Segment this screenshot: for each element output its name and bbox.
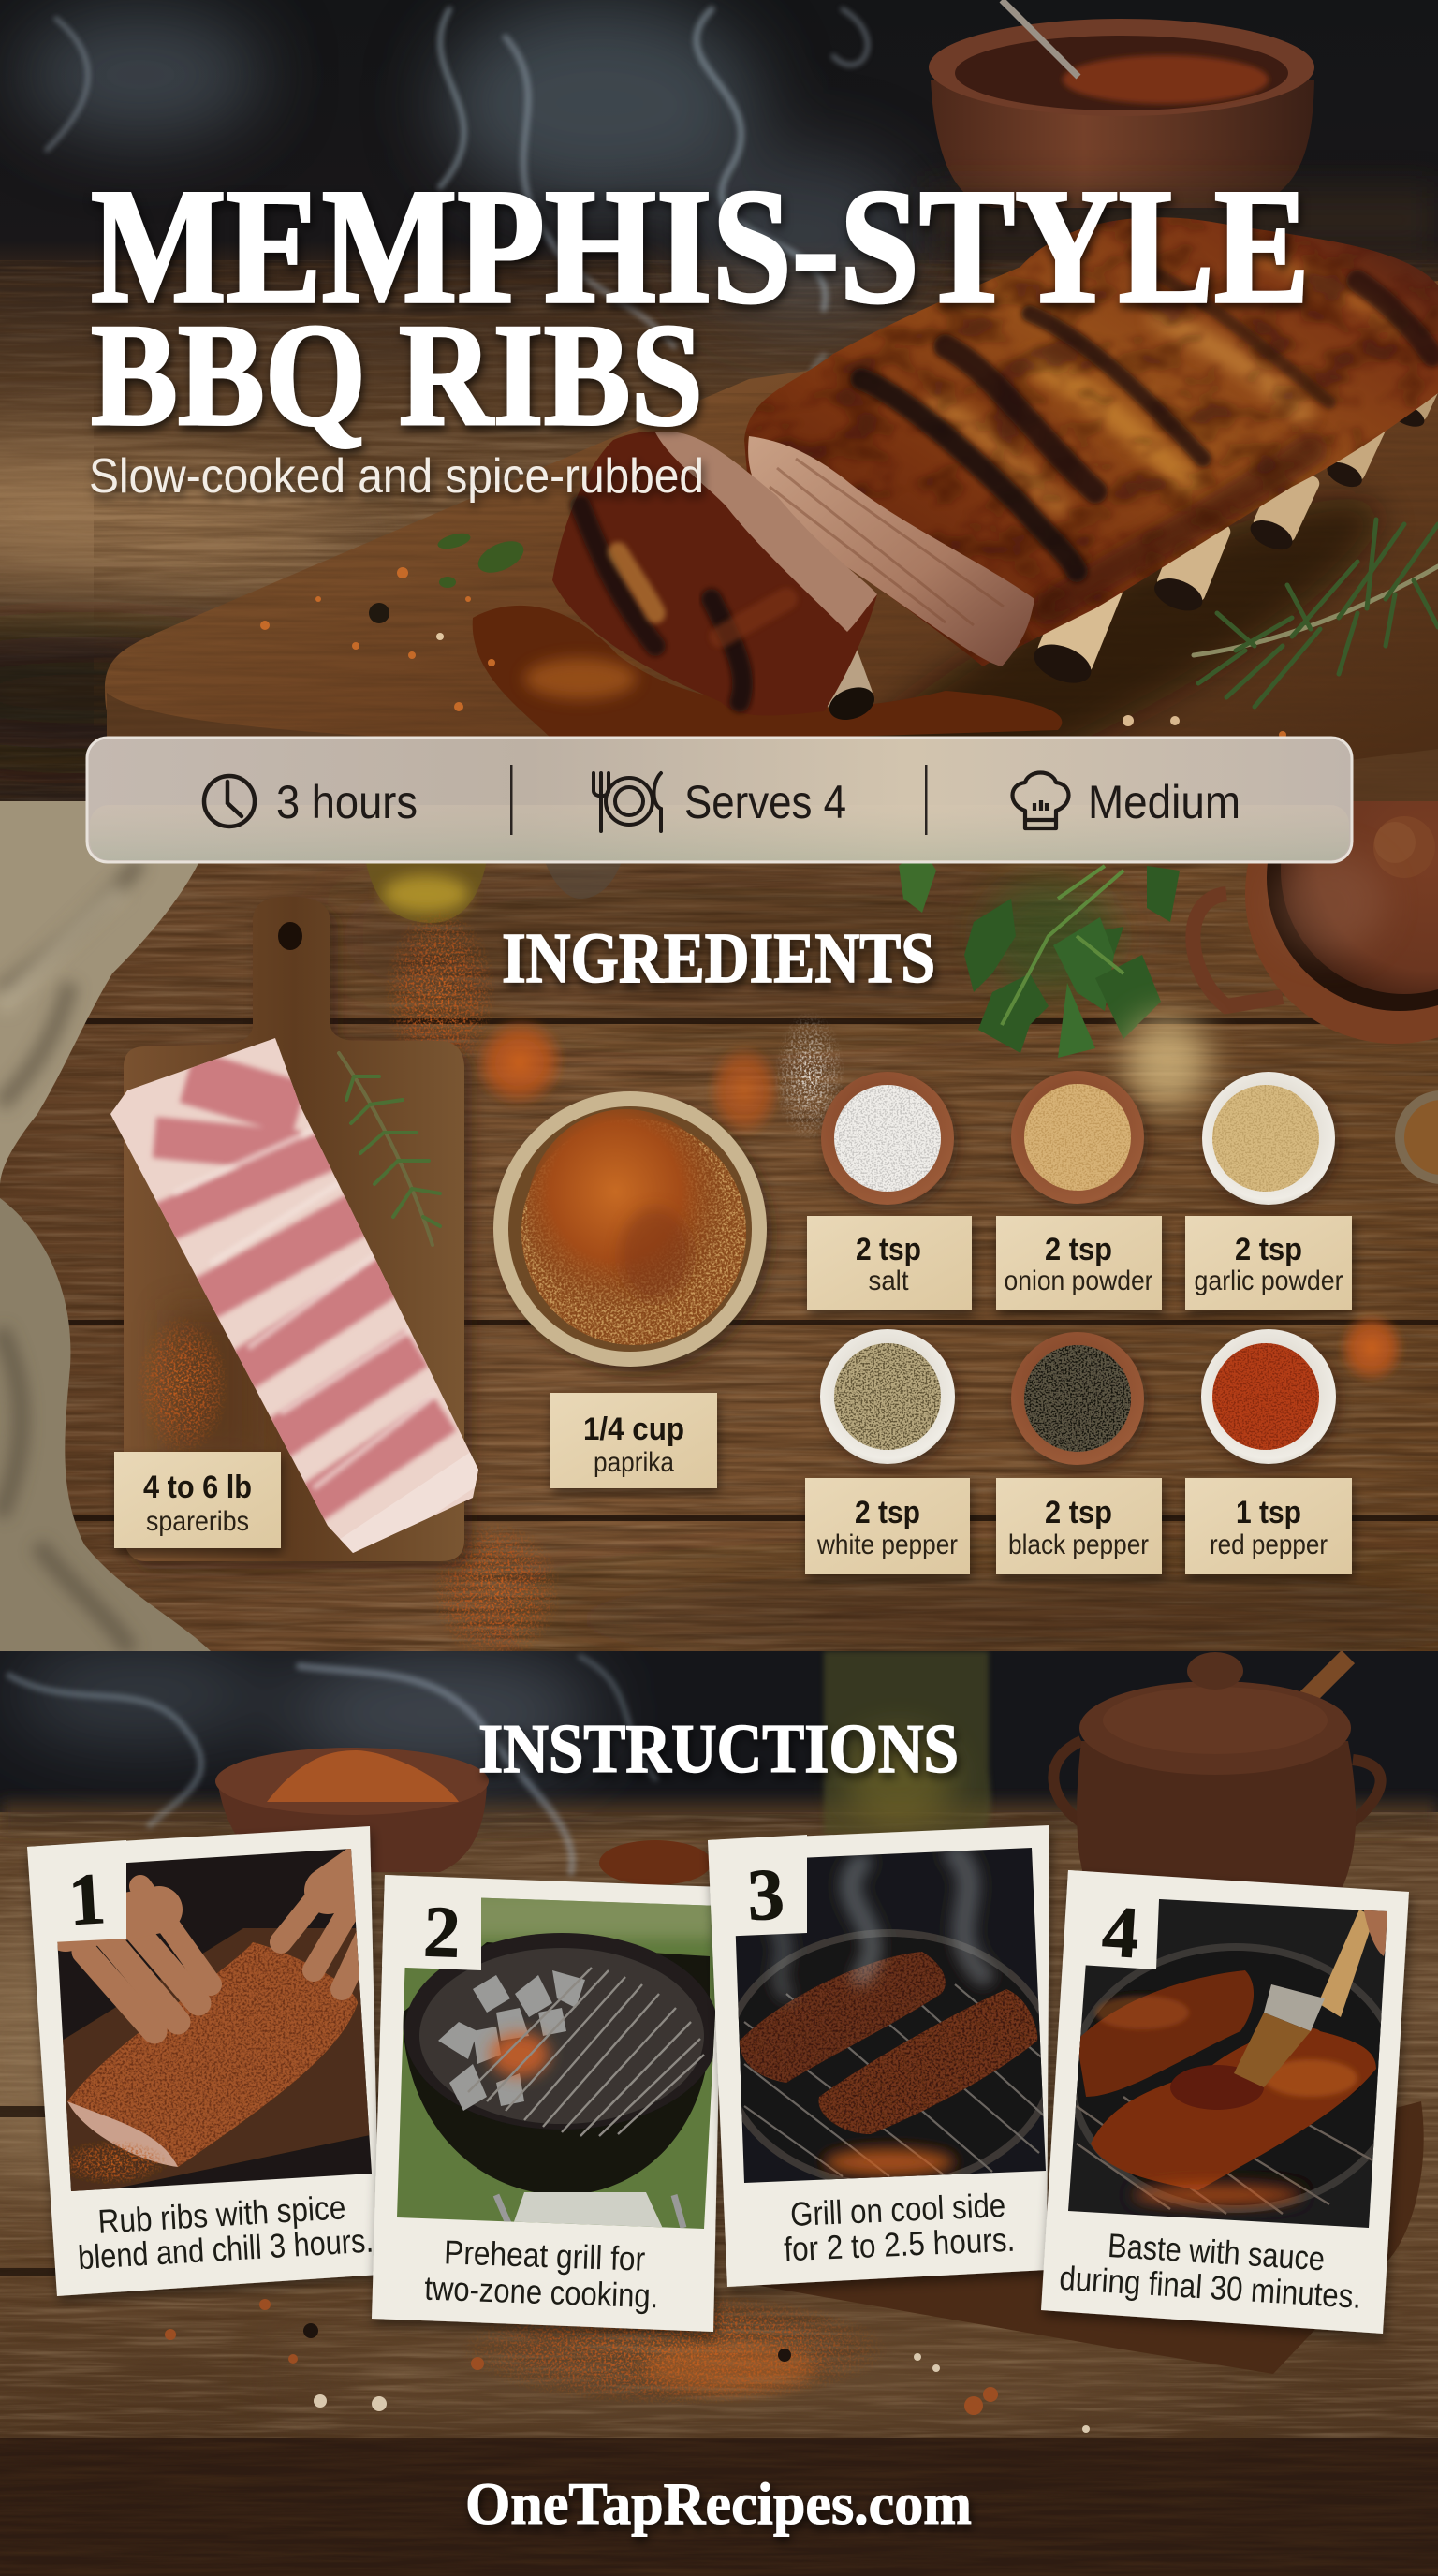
icon: basting brush xyxy=(1234,1910,1374,2087)
photo: ribs grilling on cool side xyxy=(726,1844,1053,2186)
info bar: time, servings, difficulty xyxy=(87,738,1352,862)
icon: wooden cutting board with handle xyxy=(124,897,472,1569)
label: red pepper xyxy=(1185,1478,1352,1574)
photo: basting ribs with sauce xyxy=(1067,1891,1400,2232)
label: garlic powder: 2 tsp xyxy=(1235,1232,1302,1267)
icon: charcoal pile xyxy=(438,1970,585,2111)
icon: clay pot with lid xyxy=(1193,744,1438,1044)
label: salt: salt xyxy=(869,1266,909,1296)
label: red pepper: 1 tsp xyxy=(1236,1495,1301,1530)
number tab 2 xyxy=(382,1875,481,1970)
card: step 1: 1 xyxy=(66,1857,108,1940)
caption 3: for 2 to 2.5 hours. xyxy=(783,2220,1016,2268)
photo: kettle grill with coals xyxy=(393,1891,721,2232)
icon: spice dust scatter xyxy=(384,908,1405,1661)
icon: chef hat xyxy=(1013,773,1069,828)
divider 1 xyxy=(510,765,513,835)
label: garlic powder xyxy=(1185,1216,1352,1310)
heading: ingredients: INGREDIENTS xyxy=(502,919,935,998)
icon: smoke clouds and wisps xyxy=(0,0,932,371)
caption 1 xyxy=(75,2187,374,2276)
number tab 3 xyxy=(708,1835,807,1937)
card: step 4: 4 xyxy=(1100,1890,1141,1973)
text: serves 4: Serves 4 xyxy=(684,776,846,828)
icon: salt bowl xyxy=(821,1072,958,1210)
footer band xyxy=(0,2438,1438,2576)
label: paprika: paprika xyxy=(594,1447,674,1478)
icon: cutting board xyxy=(94,281,1438,858)
icon: oil jar xyxy=(360,801,632,923)
card: step 2 xyxy=(372,1875,723,2332)
divider 2 xyxy=(925,765,927,835)
icon: raw spareribs xyxy=(110,1038,487,1554)
number tab 4 xyxy=(1064,1870,1160,1969)
caption 4: during final 30 minutes. xyxy=(1058,2259,1362,2316)
icon: rib rack bones xyxy=(1034,393,1438,683)
icon: spice rub specks on board xyxy=(136,1315,229,1456)
panel: ingredients wooden table xyxy=(0,744,1438,1666)
label: paprika xyxy=(550,1393,717,1488)
label: salt xyxy=(807,1216,972,1310)
subtitle: Slow-cooked and spice-rubbed xyxy=(89,449,704,504)
icon: small spice bowls xyxy=(820,1071,1339,1471)
card: step 3 xyxy=(708,1825,1053,2287)
caption 2: Preheat grill for xyxy=(444,2232,646,2278)
icon: ribs peeking behind cards xyxy=(599,1840,712,1885)
icon: linen towel xyxy=(0,801,217,1651)
card: step 2: 2 xyxy=(422,1890,462,1973)
label: onion powder xyxy=(996,1216,1162,1310)
label: black pepper: black pepper xyxy=(1008,1530,1149,1560)
icon: scattered spices xyxy=(260,567,1286,739)
caption 3 xyxy=(782,2186,1016,2268)
label: white pepper xyxy=(805,1478,970,1574)
caption 4: Baste with sauce xyxy=(1107,2226,1326,2277)
label: onion powder: onion powder xyxy=(1004,1266,1153,1296)
caption 1: Rub ribs with spice xyxy=(96,2188,346,2241)
icon: exposed meat side xyxy=(748,436,1034,666)
icon: smoke xyxy=(9,1647,655,1872)
label: spareribs: 4 to 6 lb xyxy=(143,1470,252,1505)
label: black pepper xyxy=(996,1478,1162,1574)
icon: rosemary on board xyxy=(339,1053,440,1245)
icon: cut rib piece xyxy=(552,432,879,725)
label: white pepper: 2 tsp xyxy=(855,1495,920,1530)
icon: white pepper bowl xyxy=(820,1329,958,1469)
icon: parsley garnish xyxy=(438,534,524,588)
card: step 3: 3 xyxy=(746,1852,785,1936)
icon: onion powder bowl xyxy=(1011,1071,1148,1209)
label: garlic powder: garlic powder xyxy=(1195,1266,1343,1296)
icon: parsley xyxy=(899,847,1180,1058)
label: black pepper: 2 tsp xyxy=(1045,1495,1112,1530)
icon: garlic powder bowl xyxy=(1202,1072,1339,1210)
icon: smoke xyxy=(777,1853,983,1994)
label: spareribs: spareribs xyxy=(146,1506,249,1537)
icon: right hand xyxy=(281,1858,374,1989)
icon: bowl of spice rub xyxy=(215,1748,489,1872)
card: step 1 xyxy=(27,1826,380,2296)
label: red pepper: red pepper xyxy=(1210,1530,1328,1560)
icon: sauce pool xyxy=(473,606,1062,739)
icon: glass spice jar at edge xyxy=(1395,1090,1438,1184)
panel: instructions background xyxy=(0,1647,1438,2576)
label: onion powder: 2 tsp xyxy=(1045,1232,1112,1267)
icon: left hand xyxy=(66,1886,211,2031)
icon: red pepper bowl xyxy=(1201,1329,1339,1469)
icon: oil bottle xyxy=(824,1651,990,1835)
label: paprika: 1/4 cup xyxy=(583,1412,684,1447)
caption 1: blend and chill 3 hours. xyxy=(77,2221,374,2276)
icon: black pepper bowl xyxy=(1011,1332,1148,1471)
caption 4 xyxy=(1058,2223,1365,2316)
photo: hands rubbing spice on ribs xyxy=(47,1844,374,2195)
caption 2: two-zone cooking. xyxy=(424,2269,659,2315)
label: spareribs xyxy=(114,1452,281,1548)
panel: hero photo of glazed ribs xyxy=(0,0,1438,858)
label: white pepper: white pepper xyxy=(816,1530,958,1560)
footer: website: OneTapRecipes.com xyxy=(465,2470,972,2537)
icon: scattered spice crumbs xyxy=(165,2293,1090,2433)
icon: glazed rib rack xyxy=(740,211,1438,669)
icon: rosemary sprig xyxy=(1194,520,1438,707)
text: medium: Medium xyxy=(1088,776,1240,828)
icon: clock xyxy=(204,776,255,827)
label: salt: 2 tsp xyxy=(856,1232,921,1267)
card: step 4 xyxy=(1041,1870,1409,2334)
caption 3: Grill on cool side xyxy=(789,2186,1006,2233)
icon: clay pot xyxy=(1053,1652,1381,1910)
icon: fork and plate xyxy=(594,773,661,831)
heading: instructions: INSTRUCTIONS xyxy=(478,1711,959,1788)
number tab 1 xyxy=(27,1840,126,1942)
text: 3 hours: 3 hours xyxy=(276,776,418,828)
icon: large paprika bowl xyxy=(493,1091,772,1372)
title: line two: BBQ RIBS xyxy=(91,293,703,456)
icon: wooden board under cards xyxy=(733,2101,1424,2374)
icon: sauce bowl xyxy=(929,0,1438,253)
caption 2 xyxy=(424,2232,660,2315)
